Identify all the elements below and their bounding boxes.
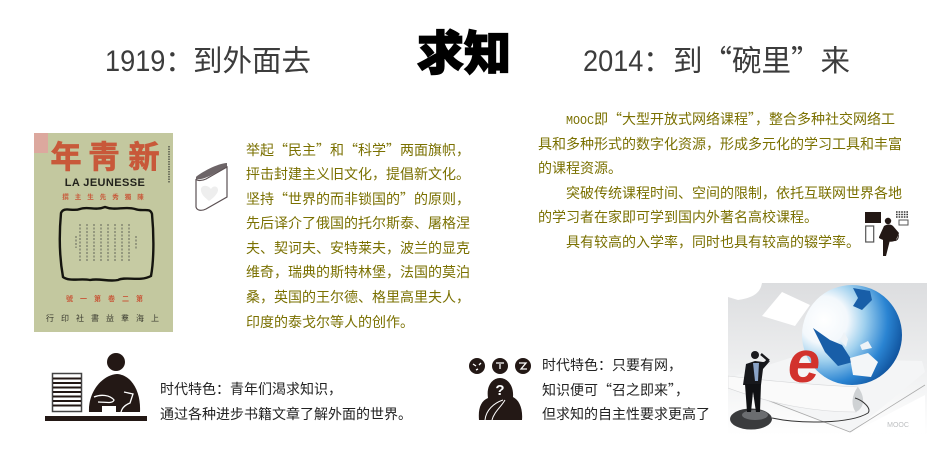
curled page [728, 376, 858, 412]
title: 求知 [417, 15, 511, 84]
text block: left: 先后译介了俄国的托尔斯泰、屠格涅 [246, 213, 470, 233]
issue line: 號一第卷二第 [66, 294, 150, 303]
text block: left: 举起“民主”和“科学”两面旗帜， [246, 140, 470, 160]
text block: right: 具有较高的入学率，同时也具有较高的辍学率。 [566, 232, 860, 252]
icon: thinker with question mark [469, 358, 531, 420]
text block: left: 桑，英国的王尔德、格里高里夫人， [246, 287, 470, 307]
text block: right: 具和多种形式的数字化资源，形成多元化的学习工具和丰富 [538, 134, 902, 154]
publisher line: 行印社書益羣海上 [46, 313, 166, 323]
masthead: 年 [50, 140, 82, 175]
illustration: globe and businessman on mouse [728, 283, 927, 432]
heading: 2014 [583, 38, 850, 80]
heading: 1919: 到外面去 [193, 38, 311, 80]
caption: left era feature [160, 379, 412, 424]
icon: book [195, 163, 228, 211]
heading: 2014: 2014 [583, 45, 643, 78]
caption: left era feature: 时代特色：青年们渴求知识， [160, 379, 342, 399]
latin title: LA JEUNESSE [65, 177, 145, 189]
text block: right: 突破传统课程时间、空间的限制，依托互联网世界各地 [566, 183, 902, 203]
editor line: 撰主生先秀獨陳 [62, 192, 150, 201]
text block: right: MOOC即“大型开放式网络课程”，整合多种社交网络工 [566, 109, 895, 129]
icon: reader at desk [45, 353, 147, 421]
caption: right era feature: 知识便可“召之即来”， [542, 380, 689, 400]
globe [802, 285, 902, 385]
watermark: MOOC [887, 422, 909, 429]
text block: left: 维奇，瑞典的斯特林堡，法国的莫泊 [246, 262, 470, 282]
computer mouse [730, 408, 772, 430]
businessman [743, 351, 770, 412]
seal [34, 133, 48, 153]
heading: 2014: ： [643, 38, 673, 80]
text block: right [538, 109, 902, 252]
text block: right: 的学习者在家即可学到国内外著名高校课程。 [538, 207, 818, 227]
heading: 1919: ： [165, 38, 195, 80]
ornamental frame [60, 207, 153, 281]
masthead: 靑 [88, 140, 120, 175]
mouse cable [772, 398, 869, 422]
magazine cover: La Jeunesse [34, 133, 173, 332]
heading: 2014: 到“碗里”来 [673, 38, 850, 80]
paper [728, 358, 925, 432]
text block: left [246, 140, 470, 332]
caption: right era feature: 但求知的自主性要求更高了 [542, 404, 710, 424]
text block: left: 夫、契诃夫、安特莱夫，波兰的显克 [246, 238, 470, 258]
masthead: 新 [128, 140, 160, 175]
icon: person with screens [865, 211, 908, 256]
text block: right: 的课程资源。 [538, 158, 622, 178]
caption: left era feature: 通过各种进步书籍文章了解外面的世界。 [160, 404, 412, 424]
heading: 1919 [105, 38, 311, 80]
caption: right era feature: 时代特色：只要有网， [542, 355, 682, 375]
caption: right era feature [542, 355, 710, 424]
masthead [50, 140, 160, 175]
text block: left: 抨击封建主义旧文化，提倡新文化。 [246, 164, 470, 184]
icon: thinker with question mark: ? [495, 382, 505, 399]
text block: left: 坚持“世界的而非锁国的”的原则， [246, 189, 470, 209]
letter e: e [788, 330, 820, 395]
text block: left: 印度的泰戈尔等人的创作。 [246, 312, 414, 332]
heading: 1919: 1919 [105, 45, 165, 78]
